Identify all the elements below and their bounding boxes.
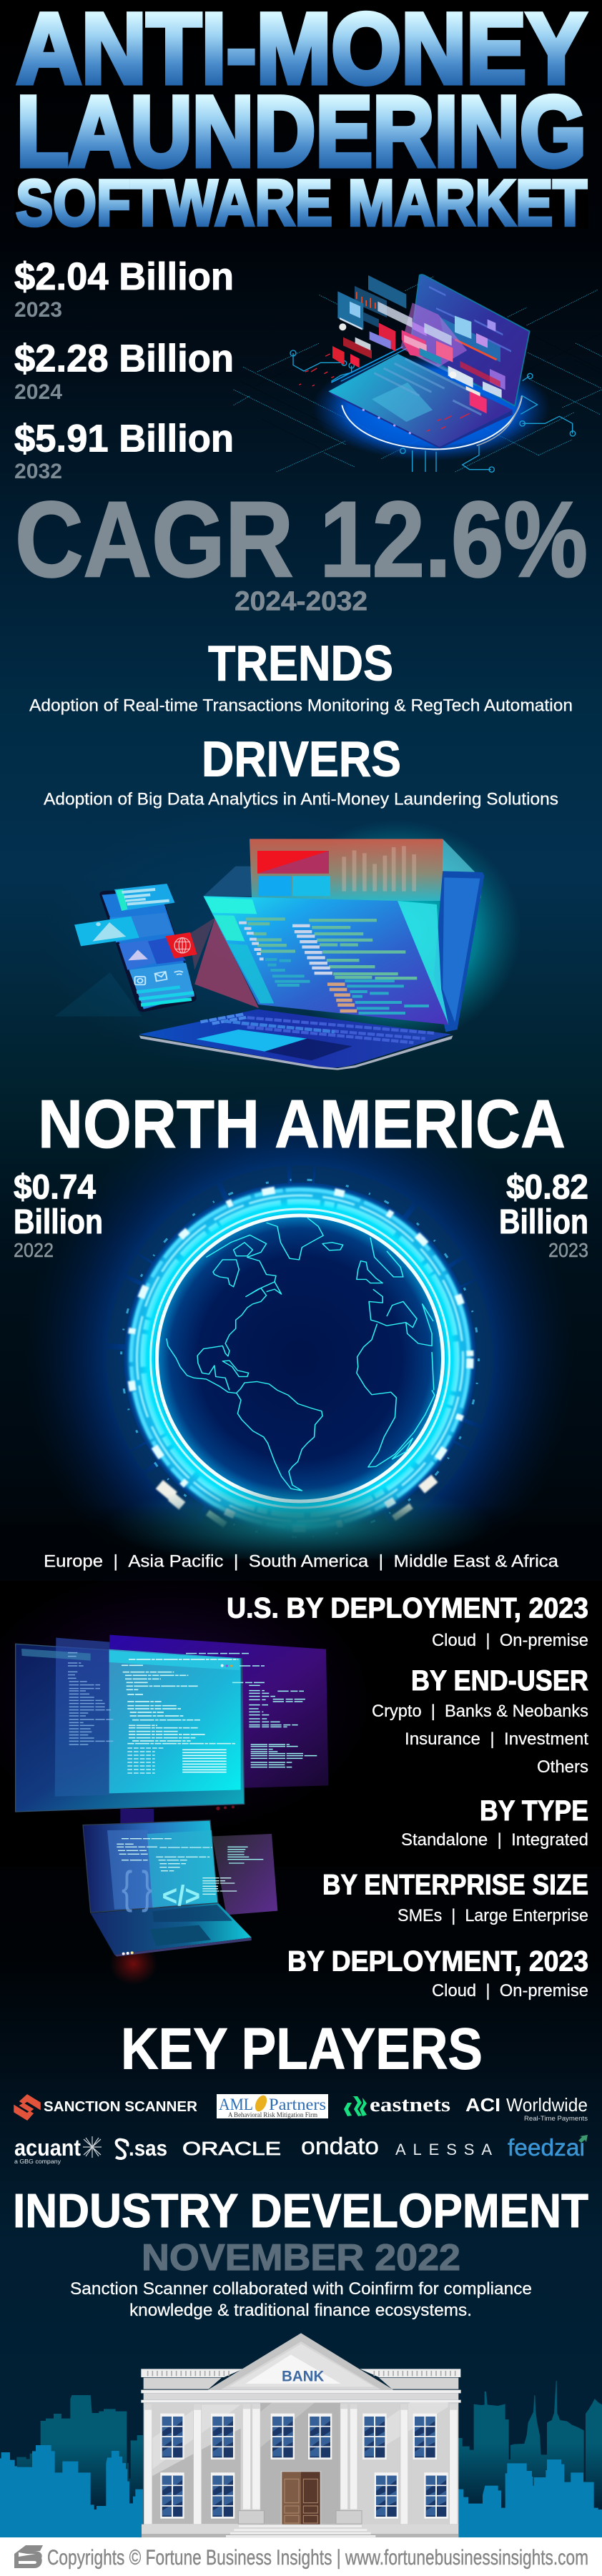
logos: key players	[14, 2093, 588, 2165]
drivers text: Adoption of Big Data Analytics in Anti-Money Laundering Solutions	[44, 789, 558, 809]
logo: Alessa: ALESSA	[395, 2141, 492, 2158]
floor fade	[0, 1505, 602, 1581]
city skyline: rear right	[458, 2381, 602, 2538]
plinths	[238, 2511, 362, 2524]
outer dim rim	[116, 1174, 485, 1543]
dotted circuit lines	[234, 277, 602, 472]
columns	[144, 2404, 458, 2525]
stat: $0.82 Billion 2023: 2023	[548, 1239, 588, 1261]
logo: Sanction Scanner	[14, 2095, 198, 2120]
city skyline: front right	[458, 2459, 602, 2538]
logo: AML Partners	[217, 2093, 328, 2118]
heading: trends: TRENDS	[208, 635, 393, 691]
stat: $0.74 Billion 2022: Billion	[14, 1203, 103, 1241]
logo: Sanction Scanner: SANCTION SCANNER	[44, 2099, 198, 2115]
illustration: glowing globe portal	[0, 1083, 602, 1634]
segment: by deployment: Cloud | On-premise	[432, 1981, 588, 2000]
segment: by type	[401, 1795, 588, 1850]
monitor indicator lights	[221, 1664, 232, 1667]
teal glow	[43, 808, 451, 1075]
city skyline: rear left	[16, 2395, 143, 2538]
city skyline: front left	[0, 2445, 143, 2538]
segment: U.S. by deployment: Cloud | On-premise	[432, 1631, 588, 1650]
stat: $0.74 Billion 2022: $0.74	[14, 1168, 96, 1207]
stat: $2.04 Billion 2023: 2023	[14, 298, 62, 322]
logo: ACI Worldwide: Real-Time Payments	[524, 2115, 588, 2123]
segment: by enterprise size	[322, 1869, 588, 1925]
segment: by end-user: BY END-USER	[411, 1665, 588, 1697]
stat: $5.91 Billion 2032: $5.91 Billion	[14, 418, 234, 460]
walls	[144, 2403, 458, 2525]
logo: ACI Worldwide: Worldwide	[506, 2094, 588, 2116]
bright band	[142, 1200, 459, 1517]
stat: $0.74 Billion 2022	[14, 1168, 103, 1261]
logo: ACI Worldwide: ACI	[465, 2094, 500, 2116]
code lines on monitor	[122, 1659, 238, 1744]
development text: Sanction Scanner collaborated with Coinfirm for compliance	[70, 2279, 532, 2299]
segment: by deployment: BY DEPLOYMENT, 2023	[287, 1946, 588, 1978]
smartphone	[99, 889, 197, 1012]
logo: AML Partners: A Behavioral Risk Mitigation Firm	[228, 2111, 317, 2118]
logo: eastnets	[344, 2093, 450, 2116]
laptop screen	[410, 275, 530, 406]
logo: Oracle: ORACLE	[182, 2138, 281, 2159]
glowing ring	[342, 395, 522, 449]
stat: $2.28 Billion 2024: $2.28 Billion	[14, 337, 234, 380]
laptop deck	[91, 1903, 252, 1955]
ground shadow triangle	[54, 972, 142, 1017]
side light panel	[398, 901, 448, 1025]
rear purple panel	[109, 1635, 328, 1788]
bank building	[141, 2333, 461, 2537]
code lines on purple panel	[186, 1654, 317, 1767]
stat: $5.91 Billion 2032	[14, 418, 234, 483]
floating panels	[368, 275, 406, 309]
segment: U.S. by deployment	[227, 1593, 588, 1650]
logo: eastnets: eastnets	[370, 2093, 450, 2116]
bank sign: BANK	[282, 2367, 325, 2385]
globe card	[165, 932, 197, 959]
upper windows	[160, 2414, 437, 2459]
bracket icons: </>	[162, 1880, 200, 1912]
title: Anti-Money Laundering Software Market	[14, 0, 588, 240]
door	[281, 2471, 321, 2525]
logo: acuant: a GBG company	[14, 2158, 61, 2165]
sphere	[159, 1217, 442, 1500]
stat: $0.82 Billion 2023: $0.82	[506, 1168, 588, 1207]
laptop base	[139, 1010, 451, 1067]
code lines	[246, 917, 417, 979]
development text: knowledge & traditional finance ecosystems.	[129, 2301, 472, 2320]
logo: AML Partners: AML	[219, 2096, 253, 2113]
section background: black panel	[0, 1581, 602, 1867]
keyboard	[200, 1014, 434, 1042]
trends text: Adoption of Real-time Transactions Monitoring & RegTech Automation	[29, 696, 573, 715]
segment: by end-user: Others	[537, 1757, 588, 1777]
blue glow under laptop	[312, 354, 551, 461]
segment: by enterprise size: SMEs | Large Enterprise	[398, 1906, 588, 1925]
logo: feedzai: feedzai	[508, 2134, 585, 2161]
laptop deck	[328, 354, 513, 447]
monitor	[16, 1644, 245, 1812]
holographic back panel	[250, 839, 443, 901]
stat: $5.91 Billion 2032: 2032	[14, 460, 62, 483]
parapet	[141, 2369, 460, 2377]
logo: ondato: ondato	[301, 2133, 379, 2159]
red projection	[194, 917, 259, 1008]
footer logo	[14, 2545, 43, 2568]
continents	[167, 1218, 435, 1491]
logo: AML Partners: Partners	[269, 2096, 326, 2113]
development text	[70, 2279, 532, 2320]
segment: U.S. by deployment: U.S. BY DEPLOYMENT, 2023	[227, 1593, 588, 1624]
CAGR period: 2024-2032	[235, 586, 367, 616]
regions list: Europe | Asia Pacific | South America | Middle East & Africa	[44, 1551, 559, 1571]
stat: $0.82 Billion 2023	[499, 1168, 588, 1261]
bracket icons	[122, 1863, 200, 1913]
heading: North America: NORTH AMERICA	[38, 1086, 566, 1163]
stat: $0.74 Billion 2022: 2022	[14, 1239, 54, 1261]
segment: by type: Standalone | Integrated	[401, 1830, 588, 1850]
laptop screen	[83, 1820, 218, 1913]
logo: SAS: .sas	[129, 2136, 167, 2161]
cornice	[141, 2390, 461, 2393]
laptop rear panel	[212, 1834, 277, 1915]
pink glow on screen	[400, 302, 467, 367]
purple glow	[0, 1568, 374, 1835]
footer	[0, 2537, 602, 2576]
base and steps	[142, 2525, 458, 2537]
laptop side edge	[328, 391, 513, 448]
segment: by deployment	[287, 1946, 588, 2000]
circuit connectors	[290, 347, 576, 472]
bracket icons: { }	[122, 1863, 152, 1913]
globe glow	[24, 1083, 575, 1634]
laptop screen	[203, 896, 448, 1025]
stat: $2.28 Billion 2024	[14, 337, 234, 404]
roof pediment	[208, 2333, 393, 2390]
illustration: laptop and smartphone	[43, 808, 521, 1075]
stat: $2.04 Billion 2023: $2.04 Billion	[14, 255, 234, 298]
segment: by end-user: Insurance | Investment	[405, 1729, 588, 1749]
laptop lights	[122, 1951, 134, 1955]
monitor stand	[120, 1809, 154, 1828]
illustration: isometric laptop with floating screens	[234, 275, 602, 472]
stat: $2.04 Billion 2023	[14, 255, 234, 322]
segment: by end-user: Crypto | Banks & Neobanks	[372, 1702, 588, 1721]
segment: by type: BY TYPE	[480, 1795, 588, 1827]
logo: acuant: acuant	[14, 2135, 81, 2161]
illustration: monitor and laptop with code	[0, 1568, 374, 1985]
stat: $2.28 Billion 2024: 2024	[14, 380, 62, 404]
segment: by end-user	[372, 1665, 588, 1777]
laptop lid	[434, 871, 484, 1032]
heading: key players: KEY PLAYERS	[121, 2016, 483, 2082]
date: November 2022: NOVEMBER 2022	[142, 2237, 460, 2279]
heading: drivers: DRIVERS	[202, 731, 401, 786]
white inner ring	[157, 1215, 443, 1501]
logo: ACI Worldwide	[465, 2094, 588, 2123]
lower windows	[160, 2472, 448, 2519]
white patches bottom	[156, 1475, 438, 1528]
logo: SAS	[116, 2136, 167, 2161]
stat: $0.82 Billion 2023: Billion	[499, 1203, 588, 1241]
